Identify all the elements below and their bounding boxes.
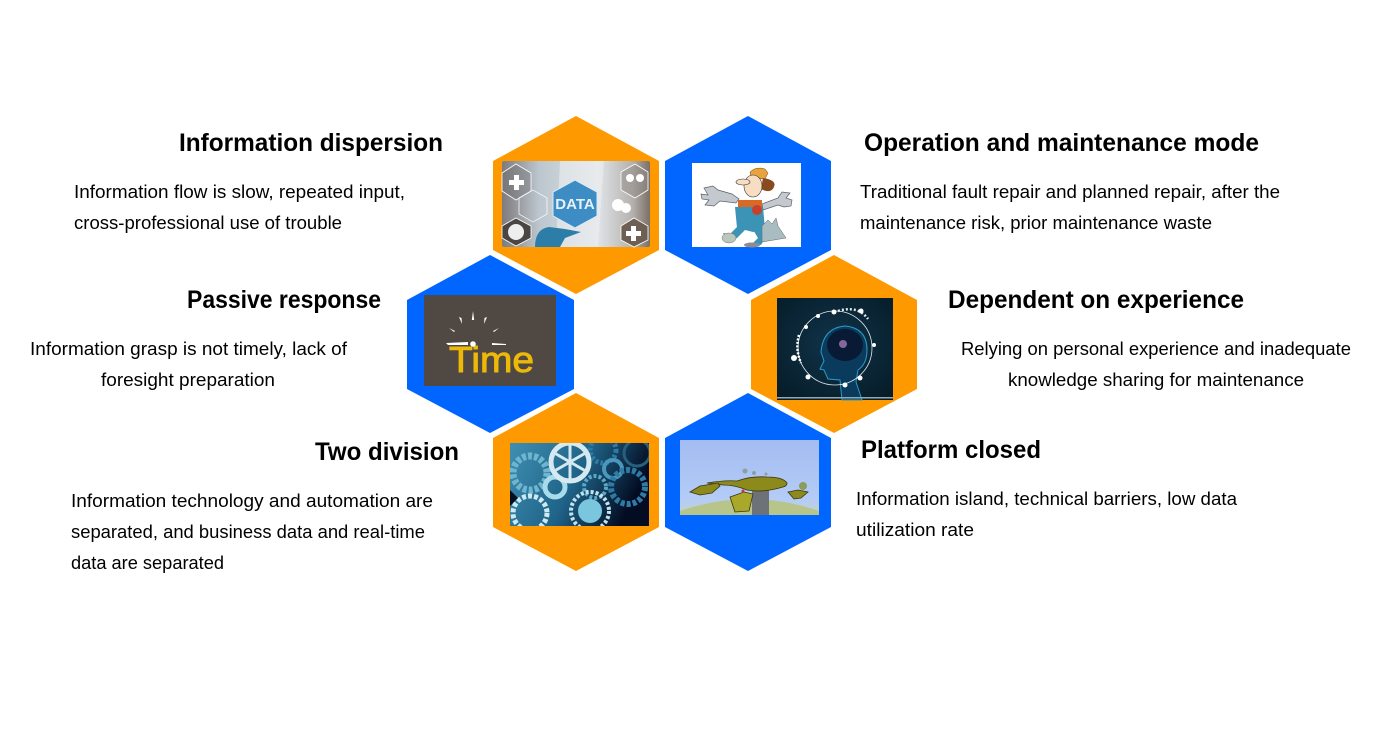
text: information dispersion description bbox=[74, 181, 405, 233]
icon: floating islands picture bbox=[680, 440, 819, 515]
panel: passive response bbox=[30, 255, 574, 433]
hexagon: blue top right bbox=[665, 116, 831, 294]
panel: operation and maintenance mode bbox=[665, 116, 1280, 294]
heading: two division: Two division bbox=[315, 438, 459, 466]
text: platform closed description: Information island, technical barriers, low data bbox=[856, 488, 1238, 509]
text: two division description: Information technology and automation are bbox=[71, 490, 433, 511]
text: dependent on experience description: Relying on personal experience and inadequate bbox=[961, 338, 1351, 359]
text: information dispersion description: Information flow is slow, repeated input, bbox=[74, 181, 405, 202]
text: dependent on experience description: knowledge sharing for maintenance bbox=[1008, 369, 1304, 390]
text: passive response description: Information grasp is not timely, lack of bbox=[30, 338, 348, 359]
icon: time logo: Time bbox=[449, 339, 534, 380]
heading: platform closed: Platform closed bbox=[861, 436, 1041, 464]
text: passive response description bbox=[30, 338, 348, 390]
heading: dependent on experience: Dependent on experience bbox=[948, 286, 1244, 314]
panel: two division bbox=[71, 393, 659, 573]
icon: data photo bbox=[502, 161, 650, 247]
heading: passive response: Passive response bbox=[187, 286, 381, 314]
hexagon: orange top left bbox=[493, 116, 659, 294]
text: operation and maintenance description: Traditional fault repair and planned repair, after the bbox=[860, 181, 1280, 202]
text: two division description: separated, and business data and real-time bbox=[71, 521, 425, 542]
text: operation and maintenance description bbox=[860, 181, 1280, 233]
icon: mechanic illustration bbox=[692, 163, 801, 248]
icon: brain head photo bbox=[777, 298, 893, 400]
icon: gears photo bbox=[510, 443, 649, 526]
text: two division description bbox=[71, 490, 433, 573]
panel: dependent on experience bbox=[751, 255, 1351, 433]
text: two division description: data are separated bbox=[71, 552, 224, 573]
icon: time logo bbox=[424, 295, 556, 386]
heading: operation and maintenance mode: Operation and maintenance mode bbox=[864, 129, 1259, 157]
panel: information dispersion bbox=[74, 116, 659, 294]
text: platform closed description bbox=[856, 488, 1238, 540]
panel: platform closed bbox=[665, 393, 1238, 571]
text: information dispersion description: cross-professional use of trouble bbox=[74, 212, 342, 233]
icon: data photo: DATA bbox=[555, 196, 595, 213]
hexagon: orange bottom left bbox=[493, 393, 659, 571]
hexagon: blue bottom right bbox=[665, 393, 831, 571]
text: passive response description: foresight preparation bbox=[101, 369, 275, 390]
hexagon: blue middle left bbox=[407, 255, 574, 433]
text: operation and maintenance description: maintenance risk, prior maintenance waste bbox=[860, 212, 1212, 233]
heading: information dispersion: Information dispersion bbox=[179, 129, 443, 157]
hexagon: orange middle right bbox=[751, 255, 917, 433]
text: dependent on experience description bbox=[961, 338, 1351, 390]
text: platform closed description: utilization rate bbox=[856, 519, 974, 540]
